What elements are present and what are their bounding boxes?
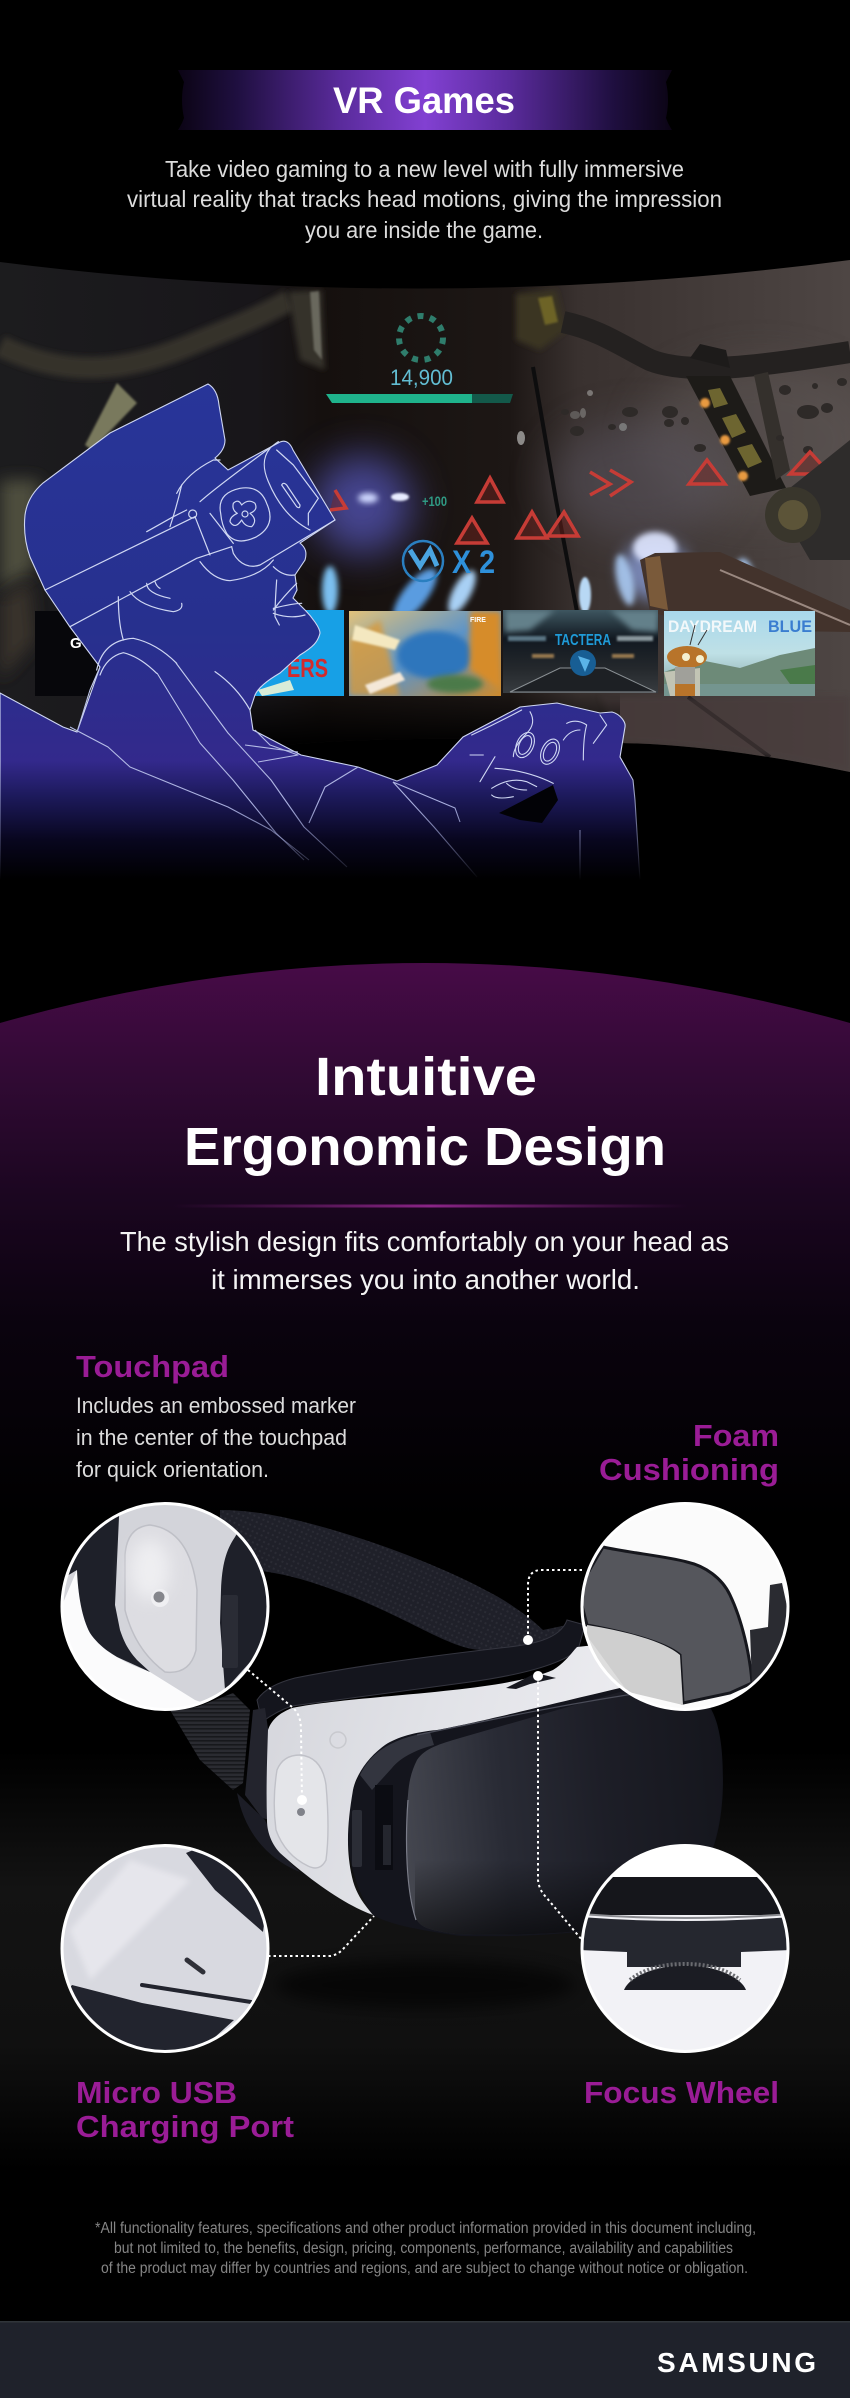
white shell xyxy=(267,1640,640,1915)
rim band xyxy=(257,1620,585,1722)
label: focus wheel: Focus Wheel xyxy=(584,2075,779,2110)
lower wall under thumbnails xyxy=(620,696,771,757)
section intro text: it immerses you into another world. xyxy=(211,1264,640,1295)
callout circle: touchpad xyxy=(60,1500,270,1715)
front cover xyxy=(406,1692,722,1935)
gold bolt and cannon xyxy=(640,440,850,632)
heading rule xyxy=(173,1204,688,1208)
section heading: Ergonomic Design xyxy=(184,1117,666,1177)
label: foam cushioning xyxy=(599,1418,779,1487)
footer bar xyxy=(0,2321,850,2398)
label: micro USB charging port: Micro USB xyxy=(76,2075,237,2110)
section intro text xyxy=(120,1226,729,1295)
head and headset outlines xyxy=(45,442,335,710)
floor shadow under headset xyxy=(275,1961,575,2009)
thumbnail 2 xyxy=(190,610,344,696)
intro text: you are inside the game. xyxy=(305,217,543,243)
label: foam cushioning: Cushioning xyxy=(599,1452,779,1487)
dotted connector: micro USB xyxy=(268,1916,374,1956)
callout circle: foam cushioning xyxy=(578,1500,790,1715)
callout circle: micro USB port xyxy=(60,1843,270,2055)
intro text: virtual reality that tracks head motions, giving the impression xyxy=(127,186,722,212)
section: VR games xyxy=(0,70,850,880)
label: micro USB charging port xyxy=(76,2075,294,2144)
label: touchpad: in the center of the touchpad xyxy=(76,1425,347,1450)
side strap xyxy=(170,1693,250,1790)
thumbnail 3: FIRE xyxy=(470,617,486,624)
label: touchpad: for quick orientation. xyxy=(76,1457,269,1482)
thumbnail 1: G xyxy=(70,635,82,652)
thumbnail 5: DAYDREAM xyxy=(668,617,757,636)
thumbnail 4: TACTERA xyxy=(555,632,611,649)
logo emboss xyxy=(330,1732,346,1748)
intro text xyxy=(127,156,722,243)
banner heading: VR Games xyxy=(333,80,515,121)
touchpad outline xyxy=(274,1755,328,1868)
thumbnail 5: BLUE xyxy=(768,617,812,636)
bonus points: +100 xyxy=(422,493,447,509)
callout circle: focus wheel xyxy=(580,1843,792,2055)
glows and laser beams xyxy=(312,455,412,555)
section intro text: The stylish design fits comfortably on your head as xyxy=(120,1226,729,1257)
label: foam cushioning: Foam xyxy=(693,1418,779,1453)
dotted connector: focus wheel xyxy=(538,1676,582,1940)
dotted connector: foam xyxy=(528,1570,582,1640)
side buttons xyxy=(352,1785,393,1870)
side clip xyxy=(245,1708,270,1820)
purple dome background xyxy=(0,963,850,1520)
thumbnail 2: ERS xyxy=(287,653,328,683)
banner heading xyxy=(178,70,672,130)
red enemy markers xyxy=(330,452,830,543)
lower shell xyxy=(237,1793,300,1872)
label: micro USB charging port: Charging Port xyxy=(76,2109,294,2144)
debris xyxy=(517,378,847,454)
visor body xyxy=(347,1688,723,1936)
illustration: person wearing VR headset xyxy=(0,384,640,880)
section: ergonomic design xyxy=(0,963,850,2277)
thumbnail 5 xyxy=(664,611,815,696)
thumbnail 1 xyxy=(35,611,200,696)
disclaimer xyxy=(95,2220,756,2277)
intro text: Take video gaming to a new level with fully immersive xyxy=(165,156,684,182)
gap between fingers xyxy=(499,785,558,823)
touchpad marker xyxy=(297,1808,305,1816)
label: touchpad xyxy=(76,1349,356,1482)
figure silhouette xyxy=(0,384,640,880)
photo: VR headset xyxy=(170,1510,723,1936)
hand outlines xyxy=(470,710,607,798)
thumbnail 3 xyxy=(349,611,501,696)
disclaimer: but not limited to, the benefits, design, pricing, components, performance, availability and capabilities xyxy=(114,2240,733,2257)
Samsung logo: SAMSUNG xyxy=(657,2347,816,2378)
game scene photo xyxy=(0,250,850,780)
thumbnail 4 xyxy=(503,610,658,693)
multiplier badge xyxy=(403,541,495,581)
marker dot: foam xyxy=(523,1635,533,1645)
game thumbnail row xyxy=(35,610,815,696)
head strap xyxy=(220,1510,567,1650)
disclaimer: *All functionality features, specifications and other product information provided in this document including, xyxy=(95,2220,756,2237)
floor glow xyxy=(0,1750,850,2170)
disclaimer: of the product may differ by countries and regions, and are subject to change without notice or obligation. xyxy=(101,2260,748,2277)
groove line xyxy=(417,1693,640,1735)
section heading: Intuitive xyxy=(315,1047,537,1107)
icon: shield ring xyxy=(399,316,443,360)
marker dot: touchpad xyxy=(297,1795,307,1805)
marker dot: focus wheel xyxy=(533,1671,543,1681)
section heading xyxy=(184,1047,666,1177)
dotted connector: touchpad xyxy=(248,1670,302,1800)
score: 14,900 xyxy=(390,365,453,390)
multiplier badge: X 2 xyxy=(452,544,495,580)
hood, shoulder and arm outlines xyxy=(70,663,580,880)
health bar xyxy=(326,394,513,403)
label: touchpad: Touchpad xyxy=(76,1349,229,1384)
label: touchpad: Includes an embossed marker xyxy=(76,1393,356,1418)
focus wheel slot xyxy=(506,1673,556,1689)
